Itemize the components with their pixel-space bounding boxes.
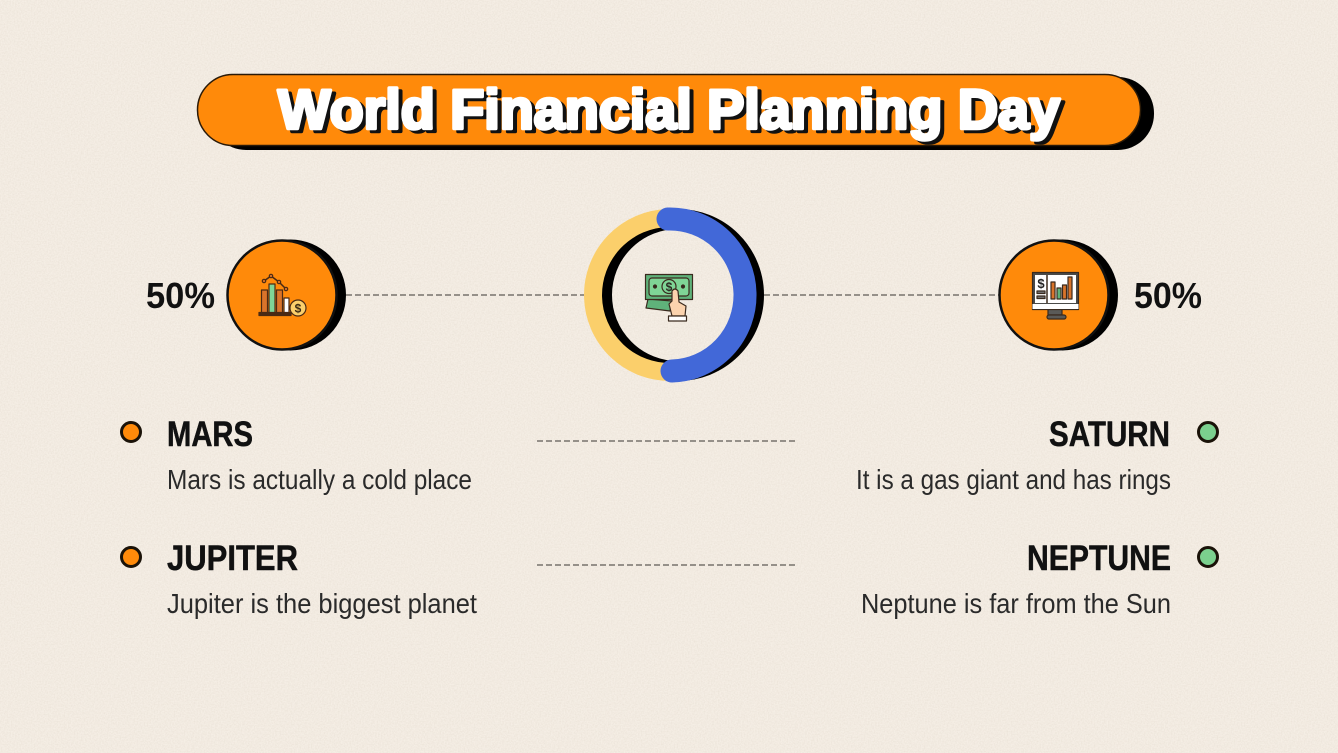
item: Mars <box>122 415 472 495</box>
Neptune heading: NEPTUNE <box>1027 539 1171 578</box>
donut chart <box>593 218 754 372</box>
title text: World Financial Planning Day <box>278 78 1060 140</box>
connector: Mars to Saturn <box>537 440 797 442</box>
icon: monitor with chart: $ <box>1037 276 1045 291</box>
connector: Jupiter to Neptune <box>537 564 797 566</box>
Neptune description: Neptune is far from the Sun <box>861 588 1171 619</box>
item: Jupiter <box>122 539 477 619</box>
connector: left circle to ring <box>346 294 584 296</box>
Mars heading: MARS <box>167 415 253 454</box>
item: Saturn <box>856 415 1218 495</box>
icon: money in hand <box>646 274 692 321</box>
Saturn description: It is a gas giant and has rings <box>856 464 1171 495</box>
Mars description: Mars is actually a cold place <box>167 464 472 495</box>
title banner <box>198 74 1154 150</box>
icon: money in hand: $ <box>666 280 673 294</box>
yellow segment <box>593 218 672 372</box>
title shadow text: World Financial Planning Day <box>282 80 1064 144</box>
Jupiter description: Jupiter is the biggest planet <box>167 588 477 619</box>
panel: right circle <box>1000 240 1118 350</box>
Jupiter heading: JUPITER <box>167 539 298 578</box>
icon: bar chart with coin: $ <box>295 302 302 316</box>
Saturn heading: SATURN <box>1049 415 1170 454</box>
item: Neptune <box>861 539 1218 619</box>
percentage right: 50% <box>1134 275 1202 316</box>
blue segment <box>668 219 745 371</box>
panel: left circle <box>228 240 346 350</box>
percentage left: 50% <box>146 275 215 316</box>
connector: ring to right circle <box>764 294 999 296</box>
